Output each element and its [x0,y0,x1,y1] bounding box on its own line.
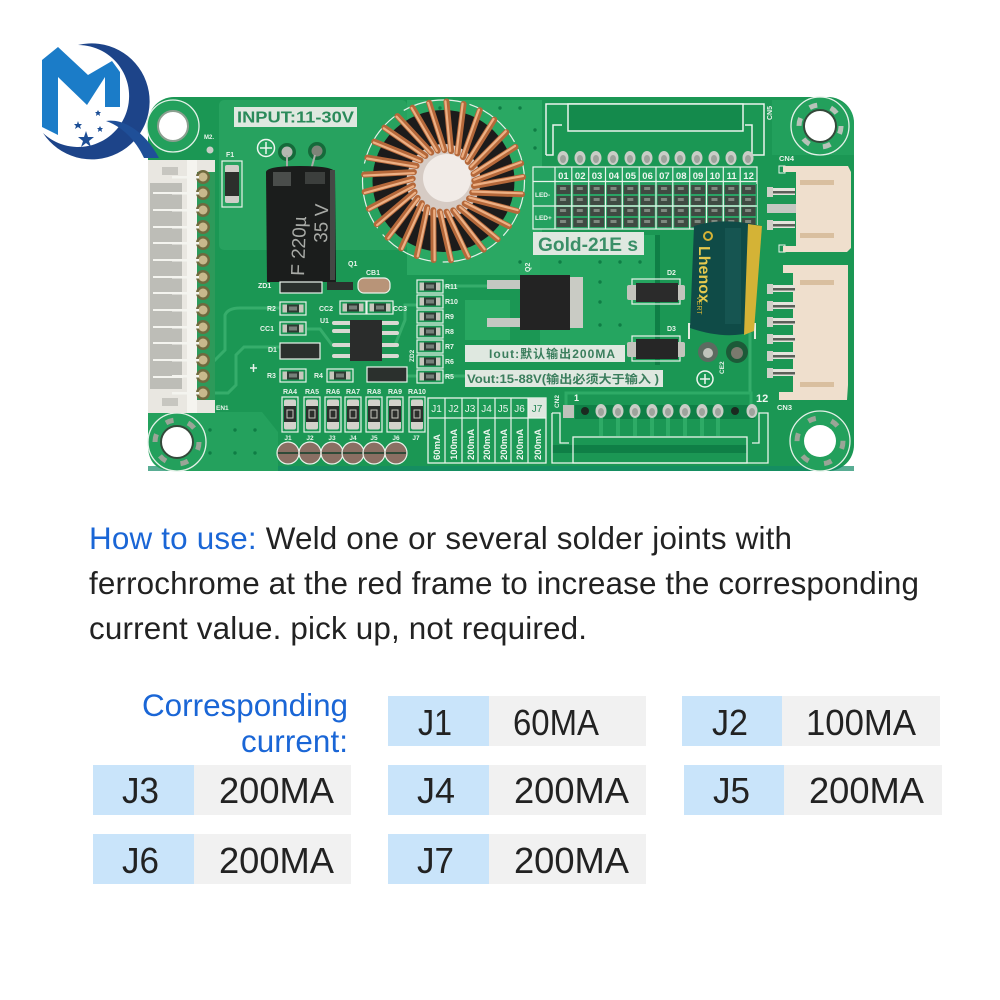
row J7: 200MA [514,840,629,881]
solder jumpers J1 to J6: J4 [349,435,357,442]
diode D2: D2 [667,270,676,277]
CN2 connector footprint: CN2 [554,395,561,408]
via dots [208,106,642,455]
corresponding current heading: Corresponding [142,688,348,723]
LED channel grid: 02 [575,171,585,182]
connector CN1 [148,160,229,413]
jumper current table [428,398,546,463]
resistors R5 to R11: R5 [445,374,454,381]
small components left cluster: R3 [267,373,276,380]
row J2 [682,696,940,746]
current-set resistors RA4 to RA10: RA6 [326,389,340,396]
connector CN4 [767,154,851,252]
row J7: J7 [417,840,454,881]
row J3: 200MA [219,770,334,811]
LED channel grid: 04 [609,171,620,182]
current-set resistors RA4 to RA10: RA7 [346,389,360,396]
IC U1: U1 [320,318,329,325]
row J4 [388,765,646,815]
black electrolytic capacitor: 35 V [311,203,333,243]
small components left cluster: R2 [267,306,276,313]
current-set resistors RA4 to RA10: RA5 [305,389,319,396]
LED channel grid: 06 [642,171,653,182]
small components left cluster: CC1 [260,326,274,333]
output current label: Iout:默认输出200MA [489,346,615,361]
LED channel grid: 08 [676,171,686,182]
row J1 [388,696,646,746]
input voltage label: INPUT:11-30V [237,110,354,126]
row J2: 100MA [806,702,916,743]
jumper current table: J4 [481,404,492,415]
LED channel grid: 10 [710,171,720,182]
MOSFET Q2: Q2 [525,263,532,272]
row J1: J1 [418,702,452,743]
connector CN4: CN4 [779,154,795,163]
row J2: J2 [712,702,748,743]
small components left cluster: D1 [268,347,277,354]
copper traces [213,280,750,393]
small components left cluster: CB1 [366,270,380,277]
jumper current table: J6 [514,404,525,415]
small components left cluster: Q1 [348,261,357,268]
row J3 [93,765,351,815]
connector CN3 [767,265,848,412]
CN2 connector footprint: 12 [756,393,768,405]
resistors R5 to R11: R7 [445,344,454,351]
green electrolytic capacitor [689,221,762,387]
row J5 [684,765,942,815]
solder jumpers J1 to J6: J7 [412,435,420,442]
output voltage label: Vout:15-88V(输出必须大于输入 ) [467,372,659,386]
how to use instructions [89,521,919,646]
LED channel grid: LED+ [535,215,552,222]
solder jumpers J1 to J6: J5 [370,435,378,442]
jumper current table: 200mA [466,429,477,460]
corresponding current heading: current: [241,724,348,759]
jumper current table: J7 [532,404,543,415]
row J1: 60MA [513,702,599,743]
LED channel grid: 12 [743,171,754,182]
resistors R5 to R11: R9 [445,314,454,321]
row J4: 200MA [514,770,629,811]
row J5: 200MA [809,770,924,811]
row J5: J5 [713,770,750,811]
LED channel grid: 05 [625,171,637,182]
board base [148,97,854,471]
jumper current table: 200mA [482,429,493,460]
mounting holes [147,97,850,471]
LED channel grid: LED- [535,192,550,199]
current table [93,696,942,884]
how to use instructions: How to use: Weld one or several solder joints with [89,521,792,556]
IC U1 [320,318,416,362]
how to use instructions: ferrochrome at the red frame to increase the corresponding [89,566,919,601]
diode D3 [627,326,685,361]
current-set resistors RA4 to RA10: RA8 [367,389,381,396]
jumper current table: J5 [498,404,509,415]
row J6: 200MA [219,840,334,881]
small components left cluster: R4 [314,373,323,380]
green electrolytic capacitor: Lhenox [695,246,712,303]
CN5 connector footprint [546,104,774,165]
green electrolytic capacitor: CE2 [719,361,726,374]
jumper current table: 60mA [432,434,443,460]
row J3: J3 [122,770,159,811]
diode D3: D3 [667,326,676,333]
row J6: J6 [122,840,159,881]
jumper current table: 200mA [515,429,526,460]
row J4: J4 [417,770,455,811]
fuse F1: F1 [226,152,234,159]
CN2 connector footprint: 1 [574,393,579,403]
resistors R5 to R11: R6 [445,359,454,366]
logo stars [74,110,103,147]
how to use instructions: current value. pick up, not required. [89,611,587,646]
small components left cluster [250,261,407,382]
IC U1: ZD2 [409,349,416,362]
solder jumpers J1 to J6: J3 [328,435,336,442]
solder jumpers J1 to J6: J1 [284,435,292,442]
solder jumpers J1 to J6 [277,435,420,464]
black electrolytic capacitor [258,140,336,282]
LED channel grid: 07 [659,171,670,182]
logo Q tail [106,121,159,158]
small components left cluster: CC3 [393,306,407,313]
corresponding current heading [142,688,348,759]
black electrolytic capacitor: F 220µ [288,216,311,276]
jumper current table: J2 [448,404,459,415]
resistors R5 to R11: R11 [445,284,458,291]
output voltage label [465,370,663,387]
ground plane panels [148,100,854,471]
LED channel grid: 03 [592,171,602,182]
jumper current table: J3 [465,404,476,415]
jumper current table: 200mA [499,429,510,460]
green electrolytic capacitor: VERT [695,296,702,315]
model name label: Gold-21E s [538,235,638,256]
copper toroid inductor [362,100,524,262]
jumper current table: 100mA [449,429,460,460]
brand logo [42,43,159,159]
current-set resistors RA4 to RA10: RA10 [408,389,426,396]
current-set resistors RA4 to RA10: RA9 [388,389,402,396]
LED channel grid: 11 [727,171,737,182]
output current label [465,345,625,362]
CN2 connector footprint [552,393,768,463]
fuse F1 [222,152,242,207]
current-set resistors RA4 to RA10 [282,389,426,432]
LED channel grid [533,167,757,229]
resistors R5 to R11 [417,280,458,383]
connector CN1: EN1 [216,405,229,412]
current-set resistors RA4 to RA10: RA4 [283,389,297,396]
resistors R5 to R11: R10 [445,299,458,306]
small components left cluster: CC2 [319,306,333,313]
CN5 connector footprint: CN5 [767,106,774,120]
solder jumpers J1 to J6: J2 [306,435,314,442]
MOSFET Q2 [487,263,583,330]
connector CN3: CN3 [777,403,792,412]
LED channel grid: 09 [693,171,703,182]
diode D2 [627,270,685,304]
logo M letter [42,47,120,135]
small components left cluster: ZD1 [258,283,271,290]
solder jumpers J1 to J6: J6 [392,435,400,442]
mounting holes: M2. [204,135,214,141]
PCB board photo [147,97,854,471]
resistors R5 to R11: R8 [445,329,454,336]
LED channel grid: 01 [558,171,569,182]
jumper current table: 200mA [533,429,544,460]
jumper current table: J1 [431,404,442,415]
row J7 [388,834,646,884]
row J6 [93,834,351,884]
logo ring swoosh [43,43,150,159]
